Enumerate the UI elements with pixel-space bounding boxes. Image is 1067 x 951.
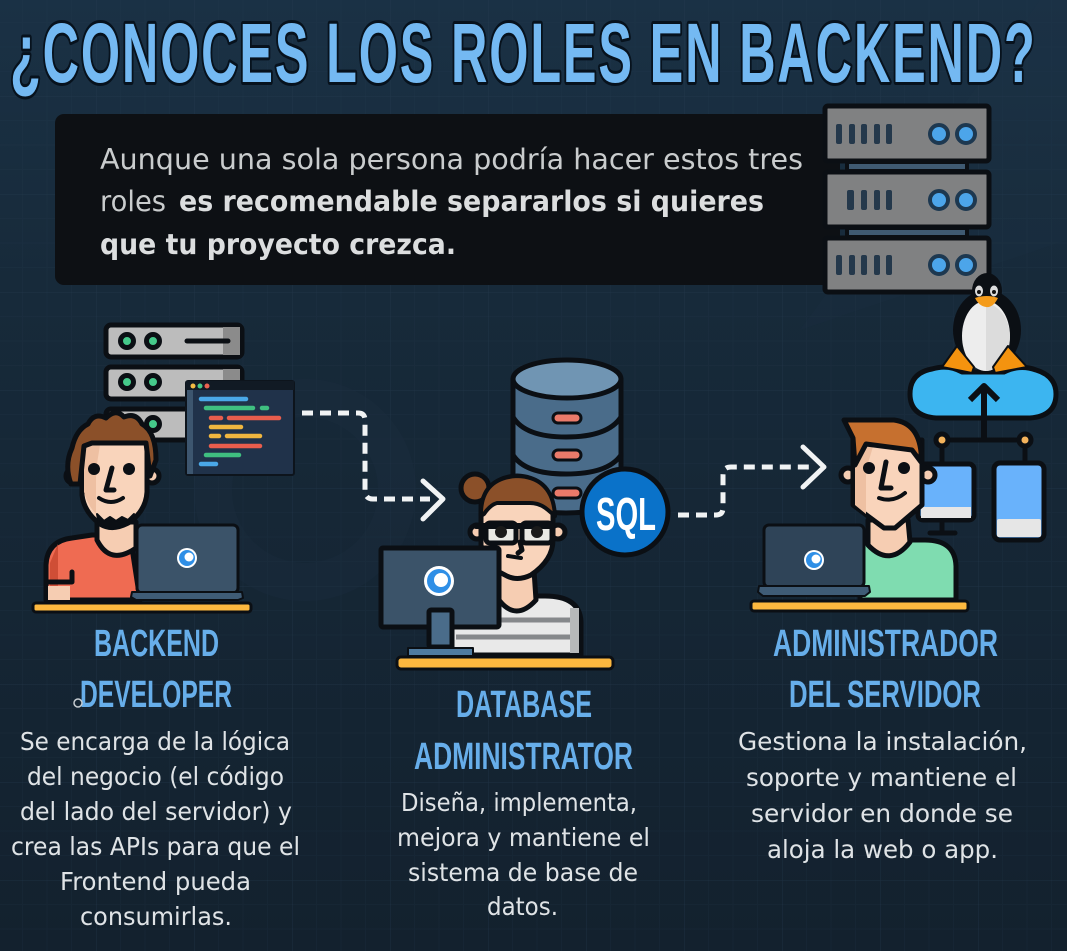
heading: backend developer: BACKEND — [94, 623, 219, 665]
text: database administrator description: mejora y mantiene el — [397, 823, 650, 852]
text: administrador description: aloja la web o app. — [767, 835, 998, 864]
text: database administrator description: sistema de base de — [408, 858, 638, 887]
text: backend developer description: del lado del servidor) y — [20, 797, 292, 826]
text: database administrator description: datos. — [487, 892, 558, 921]
icon: laptop — [758, 525, 870, 596]
illustration: server administrator — [751, 420, 968, 611]
icon: laptop — [131, 525, 243, 600]
desk — [751, 601, 968, 611]
desk — [33, 603, 251, 612]
panel: intro text — [55, 114, 840, 285]
figure: developer — [46, 413, 159, 600]
figure: administrator — [841, 420, 956, 600]
icon: SQL badge: SQL — [596, 488, 656, 540]
intro paragraph: roles — [100, 185, 166, 218]
text: administrador description: soporte y mantiene el — [746, 763, 1017, 792]
icon: cursor — [74, 699, 82, 707]
icon: phone — [994, 463, 1044, 540]
icon: server rack top right — [825, 106, 989, 292]
figure: database administrator — [452, 474, 581, 655]
icon: SQL badge — [582, 469, 668, 555]
text: backend developer description: Frontend pueda — [60, 867, 251, 896]
text: administrador description: Gestiona la instalación, — [738, 727, 1027, 756]
icon: database cylinder — [513, 360, 621, 513]
icon: desktop monitor — [381, 548, 499, 656]
arrow: developer to database — [302, 413, 443, 519]
text: administrador description: servidor en donde se — [751, 799, 1013, 828]
text: backend developer description: del negocio (el código — [27, 762, 284, 791]
arrow: database to server administrator — [678, 447, 824, 515]
illustration: database administrator — [381, 360, 668, 669]
text: backend developer description: Se encarga de la lógica — [20, 727, 290, 756]
illustration: backend developer — [33, 325, 294, 612]
title: ¿CONOCES LOS ROLES EN BACKEND? — [10, 6, 1035, 100]
intro paragraph: que tu proyecto crezca. — [100, 228, 456, 261]
intro paragraph: Aunque una sola persona podría hacer estos tres — [100, 143, 803, 176]
icon: desktop — [918, 464, 974, 533]
icon: penguin — [942, 273, 1027, 373]
icon: code window — [186, 381, 294, 475]
text: backend developer description: crea las APIs para que el — [11, 832, 300, 861]
text: database administrator description: Diseña, implementa, — [401, 788, 637, 817]
text: backend developer description: consumirlas. — [80, 902, 232, 931]
heading: administrador del servidor: DEL SERVIDOR — [789, 674, 981, 716]
desk — [397, 657, 613, 669]
heading: database administrator: ADMINISTRATOR — [414, 736, 633, 778]
icon: network arrow — [936, 386, 1031, 464]
heading: backend developer: DEVELOPER — [80, 674, 232, 716]
icon: cloud — [910, 367, 1056, 418]
heading: database administrator: DATABASE — [456, 684, 592, 726]
intro paragraph: es recomendable separarlos si quieres — [179, 185, 764, 218]
icon: cloud with Linux penguin and devices — [910, 273, 1056, 540]
icon: server stack — [106, 325, 242, 440]
